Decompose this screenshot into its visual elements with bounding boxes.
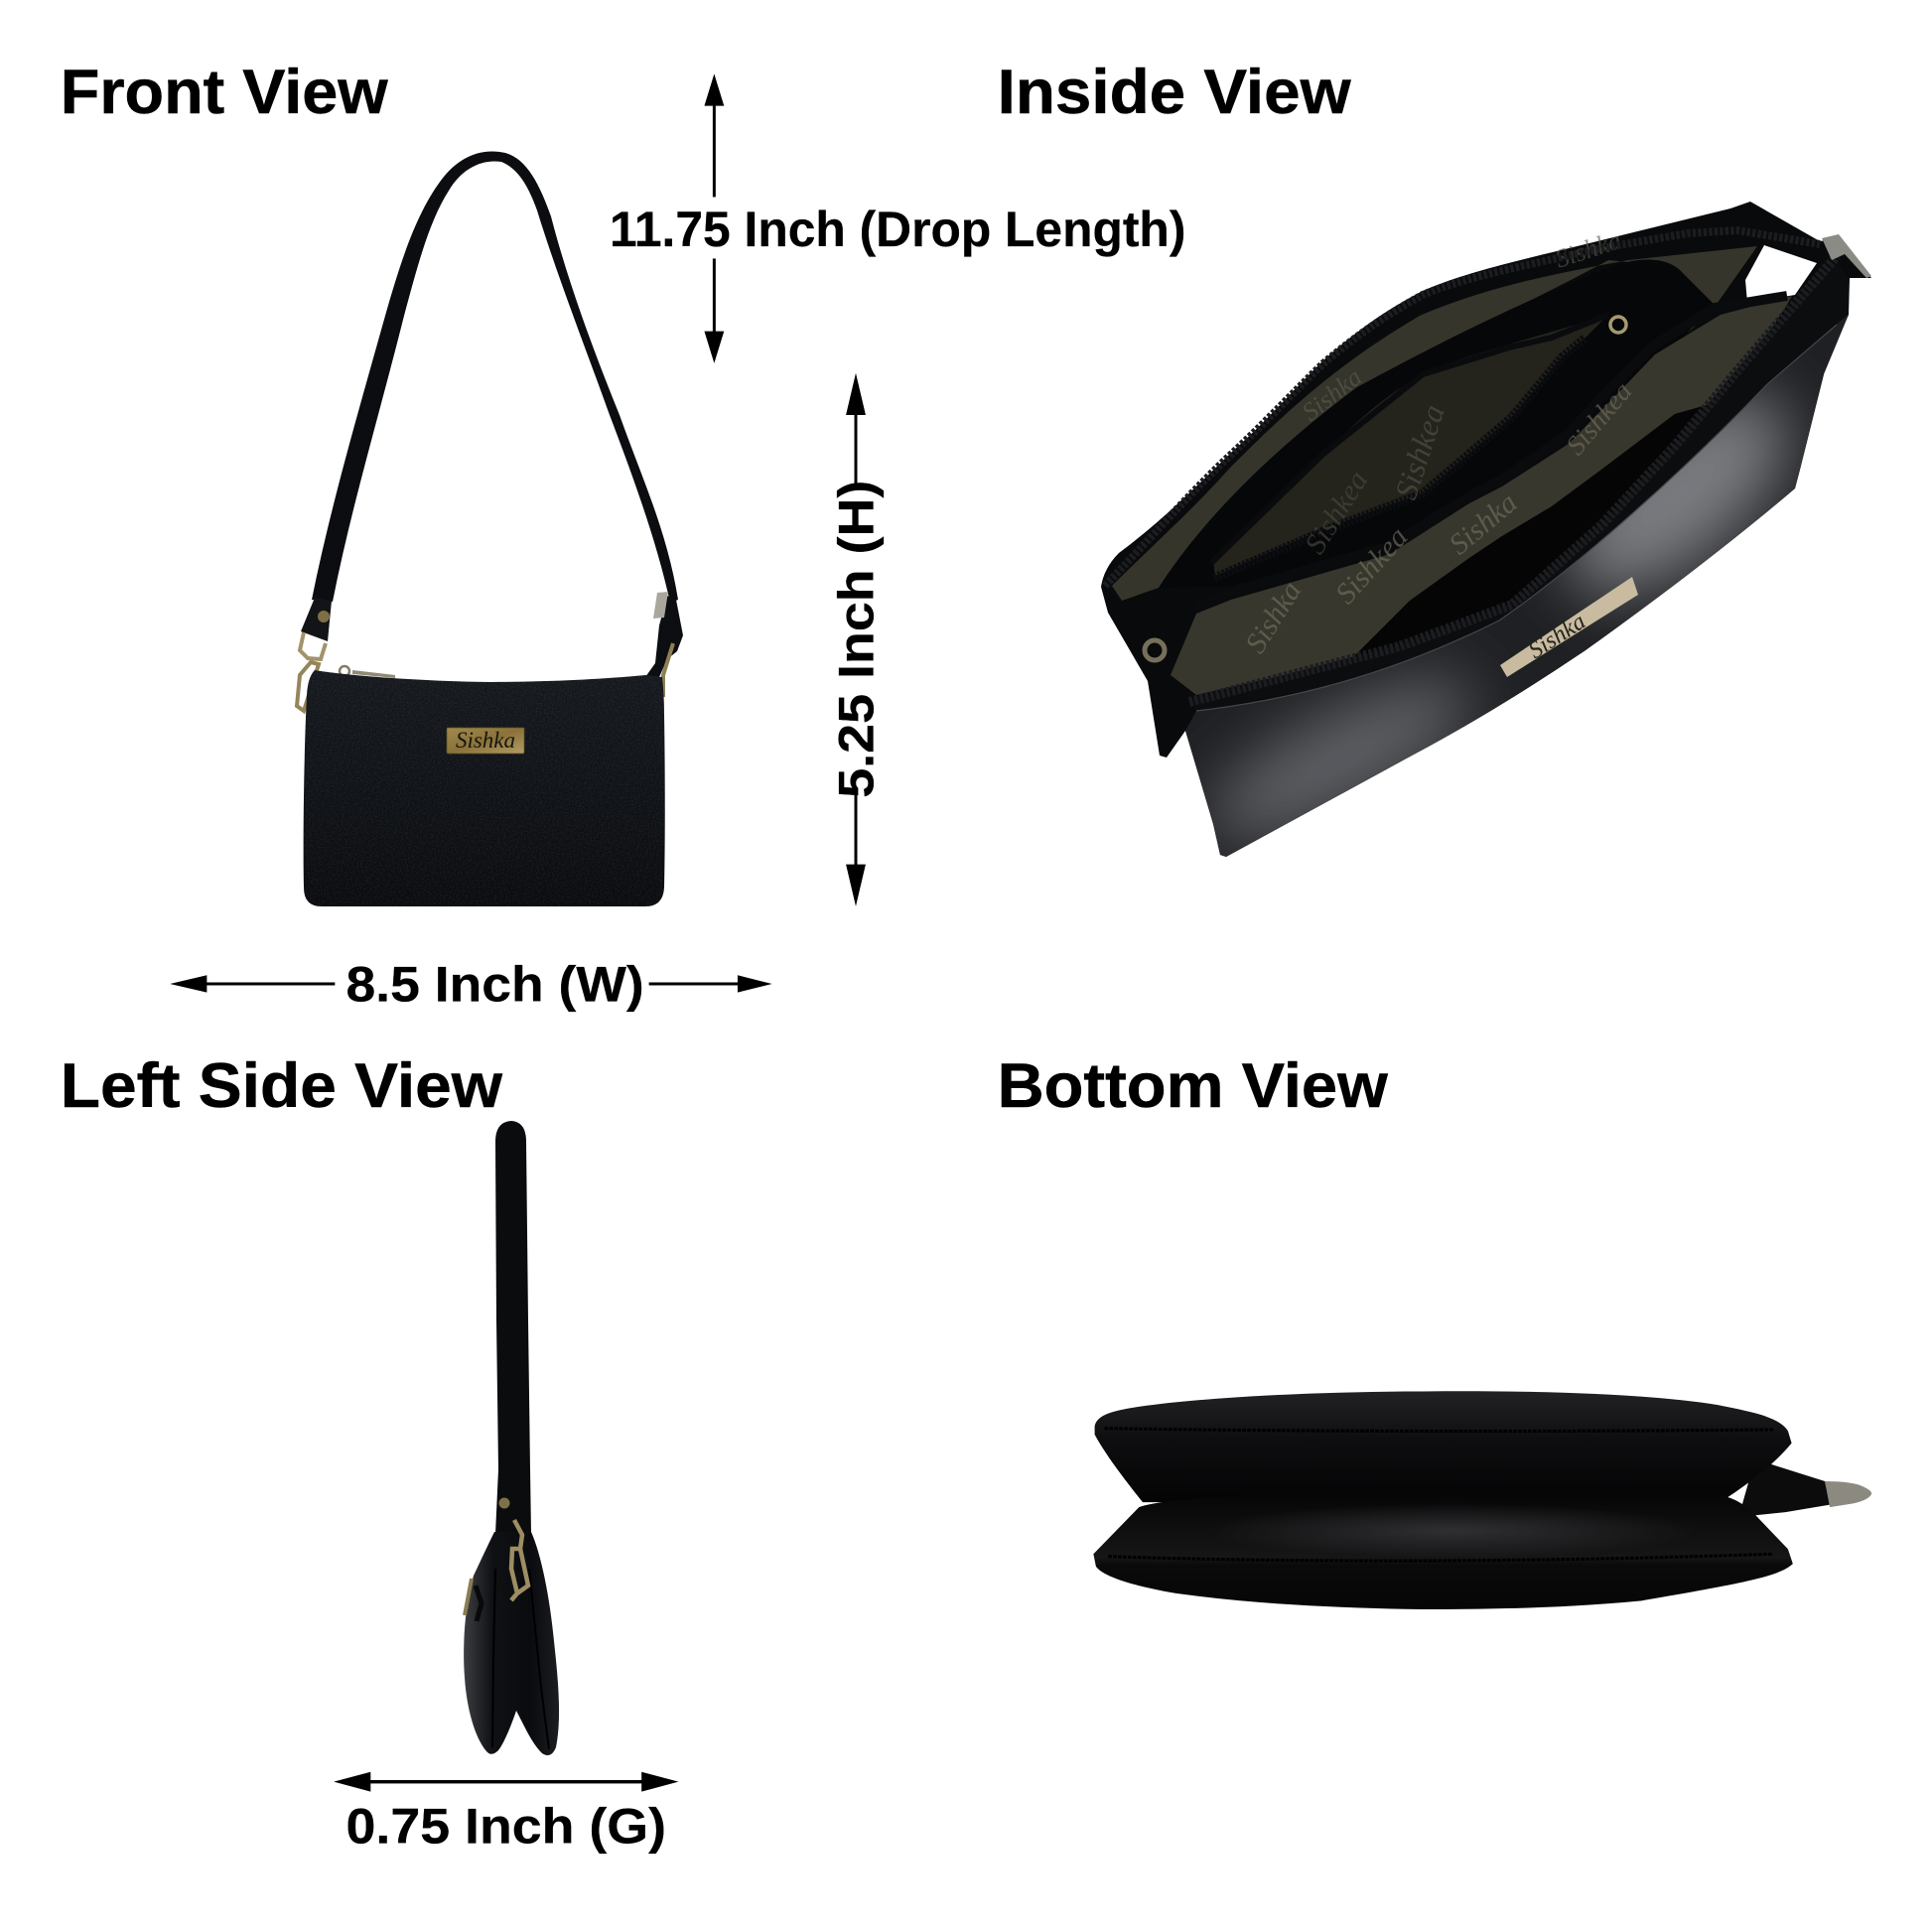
front zipper [1189,256,1837,702]
rear compartment lining [1112,246,1757,601]
white wedge between compartments [1745,245,1817,303]
lining script pattern: Sishkea [1329,521,1415,611]
top zipper [1105,230,1820,586]
bottom view bag [1093,1391,1871,1609]
brass logo plate: Sishka [456,728,515,753]
logo plate: Sishka [1524,609,1590,664]
front view bag [297,151,683,906]
zip pull [465,1579,472,1615]
rivet [499,1498,510,1509]
panel piping [1196,325,1837,711]
woven zipper band [1189,260,1849,711]
front leather panel [1185,315,1849,857]
label: drop length: 11.75 Inch (Drop Length) [610,202,1185,257]
lining script pattern [1239,225,1638,659]
arrow: gusset [334,1772,678,1792]
silver zipper tip [1825,1481,1871,1507]
outer silhouette [1101,202,1871,857]
lining script pattern: Sishka [1297,362,1367,427]
zipper pull [340,666,395,678]
label: width: 8.5 Inch (W) [346,956,644,1012]
zip slot [476,1586,482,1621]
zipper tab [1738,1460,1830,1517]
label: gusset: 0.75 Inch (G) [346,1799,666,1855]
heading: Left Side View: Left Side View [61,1051,503,1121]
bag body [304,670,665,906]
shoulder strap [312,151,678,603]
divider strip [1196,296,1787,608]
pocket upper zipper [1211,315,1608,563]
lower panel [1093,1494,1793,1609]
lower seam [1108,1554,1773,1561]
brass clasp [511,1520,528,1600]
arrow: height [846,373,866,906]
label: height: 5.25 Inch (H) [828,481,884,798]
heading: Inside View: Inside View [998,58,1351,127]
strap [495,1121,531,1534]
side ring [1145,640,1165,660]
lining script pattern: Sishkea [1561,376,1638,461]
right strap tab and hardware [645,592,683,697]
pocket lower zipper [1214,338,1586,578]
zipper slider [1822,234,1871,278]
heading: Front View: Front View [61,58,389,127]
lining script pattern: Sishka [1239,576,1308,659]
seams [492,1569,549,1749]
lining script pattern: Sishkea [1299,466,1374,560]
pocket lining [1213,315,1608,576]
front compartment lining [1171,296,1792,695]
lining script pattern: Sishkea [1387,400,1451,503]
brass ring [1610,317,1626,333]
inside view bag [1101,202,1876,874]
logo plate [1500,577,1638,677]
upper seam [1105,1429,1773,1432]
arrow: width [170,975,772,993]
rear pocket [1159,260,1713,588]
upper panel [1095,1391,1792,1502]
heading: Bottom View: Bottom View [998,1051,1389,1121]
left side view bag [464,1121,559,1755]
bag body [464,1532,559,1755]
front compartment interior [1350,294,1802,660]
lining script pattern: Sishka [1443,486,1524,561]
left strap tab and hardware [297,598,332,711]
lower sheen [1206,1503,1700,1558]
lining script pattern: Sishka [1552,225,1624,274]
arrow: drop length [704,73,724,363]
